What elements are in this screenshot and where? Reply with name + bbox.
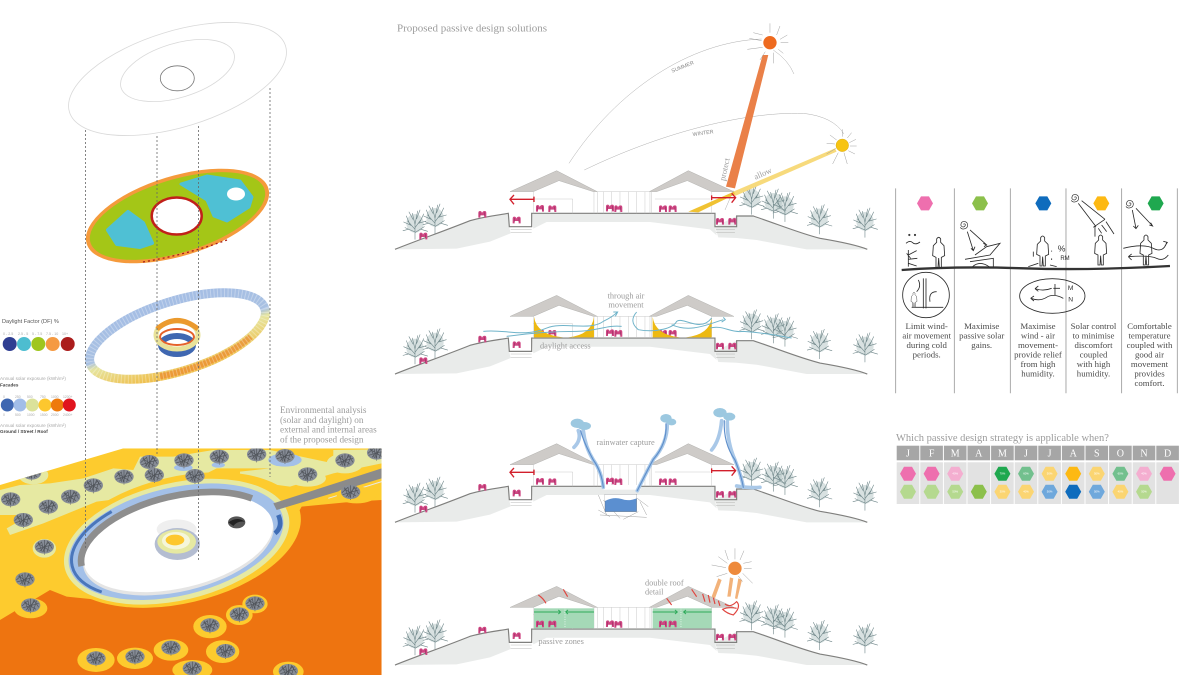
hexagons row 2: 40% (1118, 490, 1124, 494)
text block: environmental analysis caption (280, 405, 377, 444)
descriptions: air movement (902, 330, 952, 340)
legend: annual solar exposure: 2000 (51, 413, 59, 417)
descriptions: temperature (1128, 330, 1171, 340)
legend: annual solar exposure: Annual solar exposure (kWh/m²) (0, 376, 66, 381)
double roof detail (538, 589, 739, 615)
legend: daylight factor (2, 319, 75, 351)
descriptions: humidity. (1077, 368, 1110, 378)
dashed projection lines (86, 88, 270, 562)
legend: daylight factor: 10+ (62, 332, 68, 336)
descriptions: Solar control (1071, 321, 1117, 331)
descriptions: from high (1021, 359, 1056, 369)
section: daylight and air movement (395, 291, 878, 374)
descriptions: passive solar (959, 330, 1004, 340)
legend: annual solar exposure: 1000 (27, 413, 35, 417)
legend: daylight factor: 0 - 2.5 (3, 332, 13, 336)
label: rainwater capture: rainwater capture (597, 438, 655, 447)
hexagons row 1: 60% (1023, 472, 1029, 476)
icon: high humidity: M (1068, 285, 1073, 292)
hexagons row 2 (900, 485, 1152, 499)
descriptions: periods. (913, 350, 941, 360)
arrows: red eave overhang (510, 466, 736, 477)
month header (897, 446, 1179, 460)
month header: J (1024, 448, 1028, 460)
labels: through air movement, daylight access: through air (608, 291, 645, 300)
hexagons row 2: 30% (1000, 490, 1006, 494)
month header: F (929, 448, 935, 460)
diagram: daylight factor floor plan (75, 150, 280, 282)
water tank (598, 494, 648, 519)
hexagons row 2: 50% (952, 490, 959, 494)
passive zones overlays (534, 548, 753, 646)
month header: J (1048, 448, 1052, 460)
airflow lines (483, 312, 792, 338)
descriptions: with high (1077, 359, 1111, 369)
labels: through air movement, daylight access: daylight access (540, 342, 591, 351)
icon: high humidity: RM (1060, 256, 1070, 262)
text block: environmental analysis caption: of the proposed design (280, 434, 364, 444)
descriptions: Maximise (1020, 321, 1056, 331)
labels: double roof, passive zones: passive zones (538, 637, 584, 646)
hexagons row 1: 50% (1047, 472, 1053, 476)
month header: A (1070, 448, 1078, 460)
month header: D (1164, 448, 1171, 460)
hexagons row 1: 40% (1141, 472, 1147, 476)
panel: exploded solar and daylight analysis (0, 0, 386, 675)
panel: monthly strategy calendar (896, 433, 1179, 504)
icon: passive solar gains (960, 222, 1000, 267)
legend: daylight factor: Daylight Factor (DF) % (2, 319, 59, 325)
icon: high humidity (1020, 236, 1085, 313)
sun paths and rays (569, 23, 857, 196)
hexagons row 2: 40% (1023, 490, 1029, 494)
legend: annual solar exposure: 1000 (51, 395, 59, 399)
passive zones (534, 605, 712, 628)
descriptions: provides (1134, 368, 1165, 378)
hexagons row 2: 50% (1141, 490, 1147, 494)
month header: S (1094, 448, 1100, 460)
month cells (897, 462, 1179, 504)
descriptions: coupled with (1127, 340, 1173, 350)
legend: annual solar exposure: Facades (0, 382, 19, 388)
sun with rays (712, 548, 753, 599)
descriptions: provide relief (1014, 350, 1062, 360)
legend: daylight factor: 7.5 - 10 (46, 332, 58, 336)
map: site solar exposure plan (0, 446, 386, 675)
daylight wedges (534, 317, 712, 337)
hexagons row 2: 50% (1047, 490, 1053, 494)
section: rainwater capture (395, 444, 878, 522)
descriptions: during cold (907, 340, 947, 350)
hexagons row 1: 70% (1000, 472, 1006, 476)
labels: double roof, passive zones (538, 579, 684, 646)
descriptions: gains. (971, 340, 992, 350)
section: passive zones and double roof (395, 586, 878, 665)
legend: annual solar exposure (0, 376, 76, 434)
sketch row (896, 188, 1177, 393)
icon: high humidity: % (1058, 244, 1066, 254)
legend: annual solar exposure: 1500 (40, 413, 48, 417)
month header: M (951, 448, 960, 460)
descriptions: good air (1135, 350, 1164, 360)
sun paths and rays: WINTER (692, 129, 714, 138)
text block: environmental analysis caption: Environmental analysis (280, 405, 367, 415)
heading: proposed passive design solutions: Proposed passive design solutions (397, 22, 547, 34)
legend: daylight factor: 5 - 7.5 (32, 332, 42, 336)
calendar title: Which passive design strategy is applicable when? (896, 433, 1109, 444)
legend: annual solar exposure: 0 (3, 395, 5, 399)
labels: through air movement, daylight access: movement (608, 300, 644, 309)
descriptions (902, 321, 1173, 388)
legend: annual solar exposure: 0 (3, 413, 5, 417)
hexagons row 1: 60% (1118, 472, 1124, 476)
hexagons row 2: 50% (1094, 490, 1100, 494)
legend: daylight factor: 2.5 - 5 (18, 332, 28, 336)
arrows: red eave overhang (510, 193, 736, 204)
legend: annual solar exposure: 500 (15, 413, 21, 417)
descriptions: Limit wind- (906, 321, 948, 331)
month header: M (998, 448, 1007, 460)
descriptions: comfort. (1134, 378, 1165, 388)
labels: through air movement, daylight access (540, 291, 645, 351)
legend: annual solar exposure: 2400+ (63, 413, 73, 417)
icon: solar control (1071, 195, 1114, 265)
legend: annual solar exposure: 1200+ (63, 395, 73, 399)
descriptions: Maximise (964, 321, 999, 331)
descriptions: Comfortable (1127, 321, 1172, 331)
legend: annual solar exposure: 750 (40, 395, 46, 399)
rain streams and clouds (574, 421, 760, 491)
sun paths and rays: protect (718, 157, 732, 182)
icon: cold period (903, 234, 949, 318)
hexagons row 1 (900, 467, 1176, 481)
rainwater overlays (571, 408, 760, 519)
labels: double roof, passive zones: double roof (645, 579, 684, 588)
descriptions: movement (1131, 359, 1169, 369)
sun paths and rays: SUMMER (671, 60, 695, 75)
month header: O (1117, 448, 1124, 460)
text block: environmental analysis caption: external and internal areas (280, 424, 377, 434)
hexagons row 1: 50% (1094, 472, 1100, 476)
icon: high humidity: N (1068, 297, 1073, 304)
icon: comfortable air movement (1123, 201, 1168, 265)
descriptions: movement- (1018, 340, 1058, 350)
descriptions: coupled (1080, 350, 1108, 360)
descriptions: wind - air (1021, 330, 1055, 340)
descriptions: humidity. (1021, 368, 1055, 378)
legend: annual solar exposure: 250 (15, 395, 21, 399)
section: sun protection (395, 23, 878, 249)
hexagons row 1: 40% (952, 472, 959, 476)
text block: environmental analysis caption: (solar and daylight) on (280, 415, 364, 425)
month header: A (975, 448, 983, 460)
month header: J (906, 448, 910, 460)
panel: strategy sketches (896, 188, 1177, 393)
labels: double roof, passive zones: detail (645, 588, 664, 597)
month header: N (1140, 448, 1148, 460)
legend: annual solar exposure: 500 (27, 395, 33, 399)
descriptions: discomfort (1074, 340, 1113, 350)
legend: annual solar exposure: Annual solar exposure (kWh/m²) (0, 423, 66, 428)
legend: annual solar exposure: Ground / Street / Roof (0, 429, 48, 434)
diagram: roof outline ellipse (55, 0, 300, 158)
diagram: facade solar exposure ring (80, 275, 275, 397)
descriptions: to minimise (1073, 330, 1114, 340)
sun paths and rays: allow (753, 166, 773, 182)
